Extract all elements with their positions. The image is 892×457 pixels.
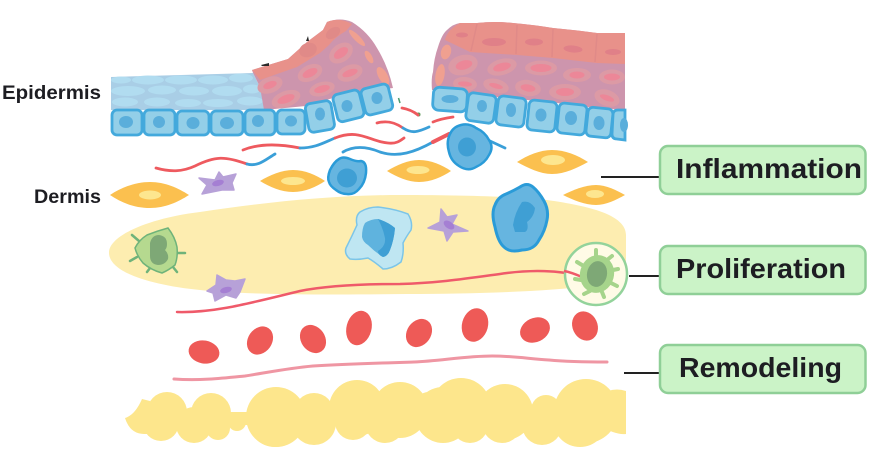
purple stellate cells [199, 172, 468, 301]
dermis yellow band [109, 195, 626, 295]
basal cells left [112, 83, 394, 135]
red blood cells [187, 305, 603, 366]
basal cells right [432, 87, 625, 140]
proliferating cell circle [564, 243, 627, 305]
leader line: proliferation [629, 275, 659, 277]
right epidermis flap [432, 22, 628, 140]
yellow fibroblasts [110, 150, 625, 208]
leader line: remodeling [624, 372, 659, 374]
box: Inflammation [660, 146, 866, 194]
label: Epidermis: Epidermis [2, 82, 101, 104]
box: Remodeling [660, 345, 866, 393]
vessels [156, 108, 505, 171]
label: Dermis: Dermis [34, 186, 101, 208]
box: Proliferation: Proliferation [676, 253, 846, 284]
left epidermis flap [111, 20, 394, 135]
leader line: inflammation [601, 176, 659, 178]
blue macrophages [328, 124, 548, 269]
upper blue layers [111, 73, 265, 110]
green cell [130, 228, 185, 273]
red capillary [177, 271, 578, 312]
pink layers [432, 22, 625, 110]
box: Remodeling: Remodeling [679, 352, 842, 383]
small wound debris specks [131, 36, 420, 417]
box: Inflammation: Inflammation [676, 153, 862, 184]
pink collagen fibre [174, 356, 607, 380]
box: Proliferation [660, 246, 866, 294]
adipose tissue [125, 378, 626, 447]
pink keratinocyte layer [252, 20, 393, 110]
